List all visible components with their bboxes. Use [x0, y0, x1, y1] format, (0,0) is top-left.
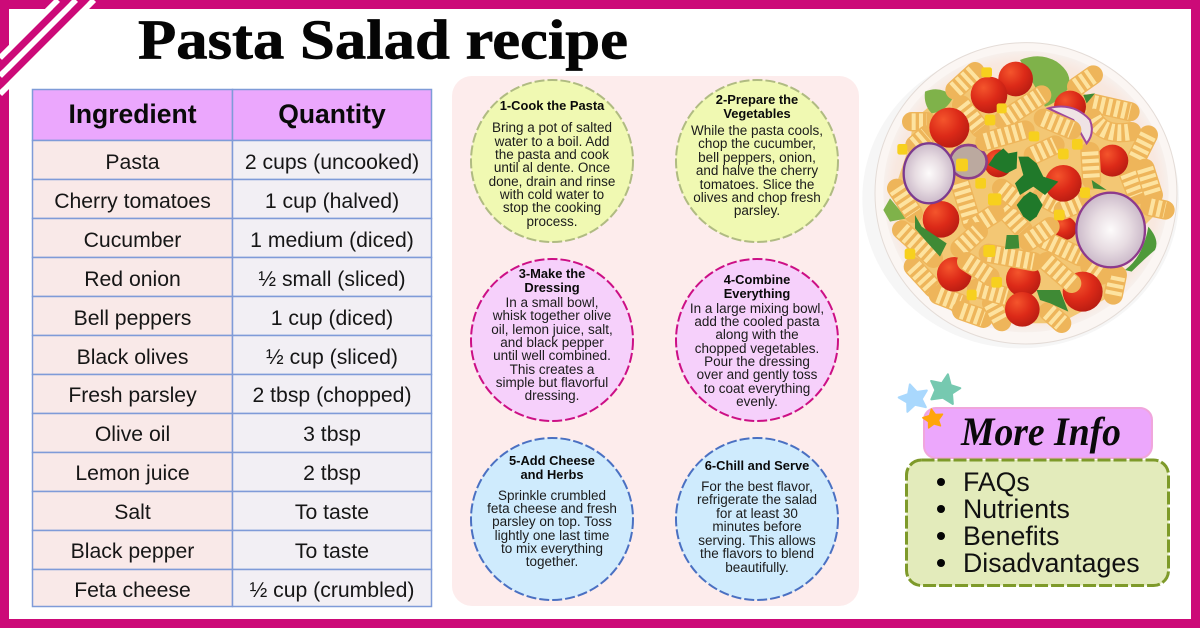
- step 5: together.: [526, 554, 578, 569]
- step 4: Pour the dressing: [704, 354, 810, 369]
- step 2: [676, 80, 838, 242]
- step 4: add the cooled pasta: [694, 314, 820, 329]
- table rows: 2 tbsp (chopped): [252, 384, 412, 407]
- corner stripes: [0, 0, 94, 94]
- step 5: parsley on top. Toss: [492, 514, 612, 529]
- red onion slices: [904, 107, 1145, 267]
- step 2: tomatoes. Slice the: [700, 177, 814, 192]
- table rows: Cherry tomatoes: [54, 190, 211, 213]
- step 1: [471, 80, 633, 242]
- step 3: 3-Make the: [519, 266, 585, 281]
- parsley: [988, 148, 1058, 222]
- step 1: until al dente. Once: [494, 160, 610, 175]
- step 6: For the best flavor,: [701, 479, 813, 494]
- fusilli pasta, lower layer: [897, 72, 1165, 323]
- step 3: In a small bowl,: [505, 295, 599, 310]
- step 2: Vegetables: [723, 106, 791, 121]
- step 2: olives and chop fresh: [693, 190, 821, 205]
- step 4: chopped vegetables.: [695, 341, 819, 356]
- table header: [32, 90, 432, 140]
- step 2: bell peppers, onion,: [698, 150, 816, 165]
- step 2: and halve the cherry: [696, 163, 818, 178]
- table rows: Bell peppers: [74, 307, 191, 330]
- step 6: [676, 438, 838, 600]
- more info list: [906, 460, 1168, 586]
- step 4: along with the: [715, 327, 799, 342]
- star: blue: [896, 381, 931, 413]
- step 6: 6-Chill and Serve: [705, 458, 809, 473]
- step 1: done, drain and rinse: [489, 174, 615, 189]
- table rows: 1 cup (halved): [265, 190, 399, 213]
- table rows: Black pepper: [71, 540, 194, 563]
- pasta over onion: [985, 118, 1072, 155]
- more info list: FAQs: [963, 467, 1030, 497]
- step 1: water to a boil. Add: [494, 134, 609, 149]
- step 5: feta cheese and fresh: [487, 501, 617, 516]
- table rows: 3 tbsp: [303, 423, 361, 446]
- step 4: evenly.: [736, 394, 778, 409]
- star: teal: [927, 371, 963, 405]
- table rows: [32, 140, 432, 606]
- panel: recipe steps: [452, 76, 859, 606]
- more info heading: [924, 408, 1152, 458]
- step 4: to coat everything: [704, 381, 810, 396]
- more info list: Benefits: [963, 521, 1059, 551]
- table rows: Cucumber: [84, 229, 181, 252]
- star: orange: [922, 407, 944, 429]
- step 6: refrigerate the salad: [697, 492, 817, 507]
- step 4: In a large mixing bowl,: [690, 301, 824, 316]
- step 3: and black pepper: [500, 335, 604, 350]
- step 5: Sprinkle crumbled: [498, 488, 606, 503]
- pasta salad plate illustration: [862, 43, 1179, 348]
- step 6: beautifully.: [725, 560, 789, 575]
- step 3: simple but flavorful: [496, 375, 608, 390]
- step 3: Dressing: [524, 280, 580, 295]
- step 2: chop the cucumber,: [698, 136, 816, 151]
- more info heading: More Info: [960, 409, 1121, 454]
- plate: [862, 43, 1179, 348]
- step 3: dressing.: [525, 388, 579, 403]
- panel background: [452, 76, 859, 606]
- step 1: with cold water to: [499, 187, 604, 202]
- step 6: minutes before: [712, 519, 802, 534]
- step 2: While the pasta cools,: [691, 123, 823, 138]
- step 5: lightly one last time: [495, 528, 609, 543]
- table rows: ½ small (sliced): [258, 268, 406, 291]
- step 4: [676, 259, 838, 421]
- step 2: parsley.: [734, 203, 780, 218]
- table rows: Fresh parsley: [68, 384, 197, 407]
- step 3: [471, 259, 633, 421]
- title: Pasta Salad recipe: [138, 10, 628, 72]
- step 3: This creates a: [510, 362, 595, 377]
- table rows: 2 cups (uncooked): [245, 151, 419, 174]
- table rows: 1 cup (diced): [271, 307, 393, 330]
- table rows: ½ cup (crumbled): [250, 579, 414, 602]
- table header: Quantity: [278, 99, 386, 129]
- step 6: for at least 30: [716, 506, 798, 521]
- step 5: 5-Add Cheese: [509, 453, 595, 468]
- table rows: Lemon juice: [75, 462, 190, 485]
- step 3: until well combined.: [493, 348, 611, 363]
- table rows: Olive oil: [95, 423, 170, 446]
- table rows: Black olives: [77, 346, 188, 369]
- ingredients table: [32, 90, 432, 606]
- step 6: the flavors to blend: [700, 546, 814, 561]
- tomatoes: [923, 62, 1128, 327]
- table rows: 1 medium (diced): [250, 229, 414, 252]
- tomato on top of pasta: [1045, 165, 1082, 202]
- more info list: Nutrients: [963, 494, 1070, 524]
- step 5: and Herbs: [520, 467, 584, 482]
- table rows: Pasta: [105, 151, 160, 174]
- step 5: to mix everything: [501, 541, 603, 556]
- table rows: To taste: [295, 540, 369, 563]
- stars: [896, 371, 963, 413]
- step 4: over and gently toss: [697, 367, 818, 382]
- table rows: Red onion: [84, 268, 181, 291]
- step 1: process.: [526, 214, 578, 229]
- table rows: Salt: [114, 501, 151, 524]
- step 3: whisk together olive: [492, 308, 611, 323]
- table rows: To taste: [295, 501, 369, 524]
- more info list: Disadvantages: [963, 548, 1140, 578]
- step 4: Everything: [724, 286, 790, 301]
- pasta mass: [897, 83, 1160, 323]
- step 1: stop the cooking: [503, 200, 601, 215]
- step 3: oil, lemon juice, salt,: [491, 322, 613, 337]
- step 2: 2-Prepare the: [716, 92, 798, 107]
- table rows: ½ cup (sliced): [266, 346, 398, 369]
- step 1: Bring a pot of salted: [492, 120, 612, 135]
- table rows: Feta cheese: [74, 579, 191, 602]
- table header: Ingredient: [68, 99, 197, 129]
- lettuce accents: [915, 93, 1107, 312]
- step 6: serving. This allows: [698, 533, 816, 548]
- corn: [897, 67, 1090, 300]
- table rows: 2 tbsp: [303, 462, 361, 485]
- step 4: 4-Combine: [724, 272, 790, 287]
- fusilli pasta, upper layer: [960, 95, 1092, 283]
- step 5: [471, 438, 633, 600]
- step 1: the pasta and cook: [495, 147, 609, 162]
- lettuce: [883, 56, 1156, 272]
- step 1: 1-Cook the Pasta: [500, 98, 605, 113]
